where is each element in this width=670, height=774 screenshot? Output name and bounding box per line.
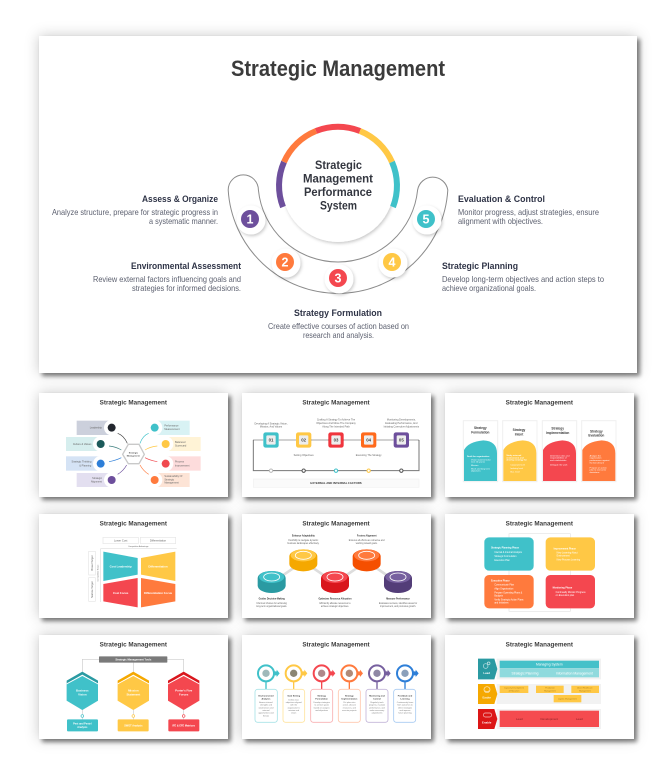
- card body text: next 10 years): [471, 461, 485, 464]
- card body text: organization: [590, 457, 602, 460]
- left items: [66, 420, 119, 488]
- puck captions: improvement, and promotes growth.: [380, 605, 416, 608]
- stage titles: Learning: [400, 698, 410, 700]
- text: environmental assessment: strategies for informed decisions.: [132, 283, 241, 293]
- quadrant labels: Cost Focus: [113, 591, 129, 595]
- card titles: Strategy: [590, 429, 603, 433]
- step descriptions: [254, 419, 420, 457]
- panel: thumbnail lead excite enable: [445, 635, 634, 739]
- step descriptions: Executing The Strategy: [356, 454, 382, 457]
- puck captions: Ensures all efforts are cohesive and: [349, 539, 385, 542]
- text: evaluation and control: Monitor progress, adjust strategies, ensure: [458, 207, 599, 217]
- puck captions: Informed choices for achieving: [256, 602, 288, 605]
- step descriptions: Along The Intended Path: [322, 425, 350, 428]
- puck captions: business landscapes effectively.: [287, 542, 320, 545]
- card body text: deviations: [590, 471, 599, 474]
- tab labels: Enable: [482, 721, 492, 725]
- enable bar: Lead: [516, 717, 523, 721]
- card titles: Strategy: [474, 426, 487, 430]
- text: evaluation and control: alignment with objectives.: [458, 216, 543, 226]
- phase text: New Process Learning: [557, 558, 581, 561]
- phase text: Environment: [557, 554, 570, 557]
- purple puck: [384, 571, 412, 593]
- quadrant labels: Cost Leadership: [110, 564, 132, 568]
- zigzag connector: [272, 561, 398, 583]
- text: environmental assessment: Environmental Assessment: [131, 261, 242, 272]
- card titles: Intent: [515, 432, 524, 436]
- right items: Measurement: [164, 428, 180, 431]
- stage descriptions: weaknesses and: [259, 707, 273, 709]
- stage titles: Goal Setting: [287, 695, 301, 698]
- thumbnail title: Strategic Management: [506, 400, 573, 406]
- stage titles: Analysis: [262, 697, 271, 700]
- stage descriptions: Regularly track: [370, 701, 384, 704]
- text: environmental assessment: Review external factors influencing goals and: [93, 274, 241, 284]
- phase text: Execution Plan: [494, 559, 511, 562]
- tab labels: Lead: [483, 671, 490, 675]
- left items: & Planning: [79, 464, 92, 467]
- colored shapes: [464, 440, 497, 481]
- phase text: Improvement Phase: [554, 547, 576, 550]
- excite labels: Logistic Management: [558, 697, 577, 700]
- right items: [147, 420, 201, 488]
- card titles: Evaluation: [588, 433, 604, 437]
- hexagon labels: Mission: [128, 688, 139, 692]
- card outlines: [463, 421, 616, 482]
- phase text: Prepare Operating Plans &: [494, 591, 523, 594]
- stage titles: Control: [373, 697, 381, 700]
- left items: Leadership: [90, 427, 103, 430]
- red puck: [321, 571, 349, 593]
- step 4 badge: 4: [389, 256, 396, 270]
- stage descriptions: resources, and: [343, 706, 356, 709]
- left items: Strategic Thinking: [71, 460, 92, 463]
- text: strategy formulation: [268, 308, 409, 340]
- panel: thumbnail generic strategy matrix: Competitive Advantage: [128, 545, 149, 548]
- target rings: [258, 665, 413, 689]
- phase text: Internal & Internal Analysis: [494, 551, 523, 554]
- card body text: Mission: [471, 465, 479, 467]
- left items: Culture & Values: [73, 443, 92, 446]
- step descriptions: Evaluating Performance, And: [385, 422, 418, 425]
- stage descriptions: from outcomes to: [397, 704, 414, 707]
- managing system bars: [500, 661, 599, 668]
- card body text: Study external: [506, 454, 522, 457]
- tool labels: [73, 723, 196, 729]
- step descriptions: Mission, And Values: [260, 426, 283, 429]
- stage descriptions: threats: [263, 714, 269, 717]
- card titles: [471, 426, 604, 437]
- stage descriptions: adjustments: [372, 712, 382, 715]
- axis headers: [89, 537, 176, 601]
- card body text: objectives: [471, 470, 481, 473]
- card body text: responsibilities of: [550, 457, 567, 460]
- U-shaped track: [228, 175, 448, 293]
- puck captions: Evaluates success, identifies areas for: [379, 602, 417, 605]
- right items: Scorecard: [175, 445, 187, 448]
- step squares: 01: [269, 438, 274, 443]
- stage titles: [259, 695, 413, 700]
- card titles: Strategy: [513, 428, 526, 432]
- ring arrows: [274, 670, 419, 677]
- step descriptions: Initiating Corrective Adjustments: [384, 425, 420, 428]
- puck captions: Optimizes Resource Allocation: [318, 597, 352, 600]
- quadrant labels: [110, 564, 173, 595]
- step descriptions: Monitoring Developments,: [387, 419, 416, 422]
- center heading: Strategic: [315, 158, 362, 172]
- orange puck: [353, 549, 381, 571]
- step 2 badge: [272, 248, 300, 278]
- step squares: [263, 432, 409, 448]
- card body text: Industry level: [510, 467, 524, 470]
- text: strategy formulation: research and analysis.: [303, 330, 374, 340]
- panel: main slide: [39, 36, 637, 373]
- excite labels: Production: [545, 687, 555, 690]
- right items: Strategic: [164, 478, 175, 481]
- card body text: plan to overcome: [590, 469, 607, 472]
- title: Strategic Management: [231, 56, 445, 81]
- stage descriptions: execute projects: [342, 709, 357, 712]
- stage descriptions: [258, 698, 414, 717]
- text: strategy formulation: Create effective courses of action based on: [268, 321, 409, 331]
- step squares: 02: [301, 438, 307, 443]
- stage descriptions: make necessary: [370, 709, 384, 712]
- managing system labels: [511, 663, 593, 675]
- hexagon labels: Porter's Five: [175, 688, 193, 692]
- step squares: 05: [399, 438, 404, 443]
- managing system labels: Managing System: [536, 663, 563, 667]
- card body text: Delegate the work: [550, 464, 568, 467]
- phase text: Execution Phase: [491, 579, 510, 582]
- panel: thumbnail six targets: [242, 635, 431, 739]
- right items: Improvement: [175, 464, 190, 467]
- card titles: Strategy: [551, 427, 564, 431]
- stage descriptions: and objectives: [315, 709, 328, 712]
- panel: thumbnail generic strategy matrix: Narrow Target: [90, 581, 94, 598]
- puck captions: [256, 535, 417, 608]
- thumbnail title: Strategic Management: [100, 400, 167, 406]
- text: environmental assessment: [93, 261, 242, 293]
- hexagon labels: Statement: [126, 693, 140, 697]
- card body text: develop strategy for: [506, 459, 527, 462]
- enable bar: Lead: [576, 717, 583, 721]
- row backgrounds: [497, 659, 601, 729]
- center heading: Performance: [304, 185, 372, 199]
- card body text: Analyze the: [590, 454, 602, 457]
- excite labels: [504, 687, 593, 700]
- right items: Management: [164, 482, 179, 485]
- puck captions: Guides Decision-Making: [259, 598, 285, 600]
- right items: Process: [175, 460, 185, 463]
- panel: thumbnail generic strategy matrix: Broad Target: [90, 555, 94, 571]
- stage descriptions: Assess internal: [259, 701, 273, 704]
- right items: Sustainability Of: [164, 475, 183, 478]
- card body text: Vision statement (for: [471, 458, 491, 461]
- phase text: Verify Strategic Action Plans: [494, 598, 524, 601]
- stage titles: Strategy: [317, 695, 327, 698]
- step 5 badge: [412, 206, 442, 234]
- thumbnail title: Strategic Management: [506, 522, 573, 528]
- step 4 badge: [378, 248, 408, 278]
- tree connectors: [82, 659, 184, 719]
- stage descriptions: organization's: [288, 706, 300, 709]
- text: strategic planning: [442, 261, 604, 293]
- panel: thumbnail 3D pucks: [242, 514, 431, 618]
- segmented ring: [279, 127, 397, 207]
- stage descriptions: refine strategies: [398, 706, 412, 709]
- text: evaluation and control: [458, 194, 599, 226]
- stage boxes: [255, 689, 416, 722]
- factors bar: EXTERNAL AND INTERNAL FACTORS: [310, 481, 362, 485]
- card body text: environment and: [506, 456, 524, 459]
- stage titles: Monitoring and: [369, 695, 385, 698]
- panel: thumbnail generic strategy matrix: [39, 514, 228, 618]
- step descriptions: Objectives And Move The Company: [316, 422, 357, 425]
- tool labels: Analysis: [77, 726, 88, 729]
- stage titles: Formulation: [315, 697, 329, 700]
- phase text: Strategic Planning Phase: [491, 547, 520, 550]
- step descriptions: Crafting A Strategy To Achieve The: [317, 419, 356, 422]
- stage descriptions: Define clear: [288, 698, 299, 701]
- center heading: Management: [303, 172, 373, 186]
- rail nodes: [269, 469, 403, 472]
- right items: Performance: [164, 425, 179, 428]
- step 3 badge: [324, 264, 354, 294]
- thumbnail title: Strategic Management: [302, 643, 370, 649]
- stage descriptions: performance, and: [369, 706, 385, 709]
- stage descriptions: progress, evaluate: [369, 704, 386, 707]
- center hexagon: [123, 444, 144, 464]
- phase boxes: [484, 537, 534, 571]
- stage descriptions: external: [262, 709, 270, 712]
- panel: thumbnail management tools: [39, 635, 228, 739]
- puck captions: Enhance Adaptability: [292, 535, 315, 538]
- card body text: Bus. level: [510, 471, 520, 473]
- center hexagon: Management: [127, 454, 140, 457]
- center heading: [303, 158, 373, 212]
- phase text: Budgets: [494, 594, 504, 597]
- tool boxes: [67, 719, 98, 731]
- card body text: each stakeholder: [550, 459, 567, 462]
- puck captions: Flexibility to navigate dynamic: [288, 539, 319, 542]
- factors bar: [253, 479, 419, 487]
- panel: thumbnail generic strategy matrix: Lower Cost: [114, 539, 128, 543]
- managing system labels: Strategic Planning: [511, 671, 539, 675]
- excite labels: Management: [544, 689, 556, 692]
- text: assess and organize: Analyze structure, prepare for strategic progress in: [52, 207, 218, 217]
- stage descriptions: Continuously learn: [397, 701, 413, 704]
- panel: thumbnail hexagon hub: [39, 393, 228, 497]
- stage descriptions: strengths and: [260, 704, 272, 707]
- connector arrows: [109, 433, 157, 474]
- central circle: [282, 130, 394, 242]
- left items: Strategic: [92, 477, 103, 480]
- phase text: Strategic Formulation: [494, 555, 517, 558]
- enable bar: [500, 711, 599, 727]
- row arrow tabs: [478, 659, 497, 679]
- tab labels: [482, 671, 492, 725]
- phase text: New Learning About: [557, 551, 578, 554]
- yellow puck: [289, 549, 317, 571]
- phase loop lines: [509, 534, 570, 611]
- stage titles: Strategy: [345, 695, 354, 698]
- enable bar: Development: [541, 717, 558, 721]
- matrix quadrants: [103, 552, 138, 581]
- hexagons: [67, 672, 98, 710]
- thumbnail title: Strategic Management: [100, 522, 167, 528]
- right items: Balanced: [175, 441, 186, 444]
- step 2 badge: 2: [282, 256, 289, 270]
- tool labels: IFE & EFE Matrices: [172, 724, 196, 727]
- stage descriptions: action, allocate: [343, 704, 357, 707]
- stage descriptions: based on analysis: [314, 707, 330, 709]
- puck captions: Efficiently allocate resources to: [320, 602, 351, 605]
- quadrant labels: Differentiation Focus: [144, 591, 173, 595]
- step descriptions: Developing A Strategic Vision,: [254, 422, 288, 425]
- connector dots: [81, 715, 185, 717]
- text: assess and organize: Assess & Organize: [142, 194, 218, 205]
- card body text: performance against: [590, 459, 610, 462]
- phase text: Communicate Plan: [494, 583, 515, 586]
- phase text: Continually Monitor Progress: [556, 591, 586, 594]
- hexagon labels: [76, 688, 193, 697]
- excite boxes: [500, 686, 599, 702]
- phase text: and Initiatives: [494, 601, 509, 604]
- stage descriptions: with the: [290, 704, 298, 707]
- stage descriptions: and improve: [400, 709, 411, 712]
- center heading: System: [320, 198, 357, 212]
- thumbnail title: Strategic Management: [506, 643, 573, 649]
- puck captions: long-term organizational goals.: [256, 605, 287, 608]
- hexagon labels: Business: [76, 688, 89, 692]
- step 3 badge: 3: [335, 272, 342, 286]
- step squares: 03: [334, 438, 339, 443]
- card body text: Prepare an action: [590, 466, 607, 469]
- text: strategy formulation: Strategy Formulation: [294, 308, 382, 319]
- card body text: Corporate level: [510, 464, 525, 467]
- stage titles: Implementation: [341, 697, 358, 700]
- step descriptions: Setting Objectives: [294, 454, 314, 457]
- panel: thumbnail four strategy cards: [445, 393, 634, 497]
- stage descriptions: objectives aligned: [286, 701, 302, 704]
- excite labels: Asset Healthcare: [577, 687, 593, 690]
- tool labels: Pest and Pestel: [73, 723, 92, 726]
- puck captions: achieve strategic objectives.: [321, 605, 349, 608]
- phase text: on Execution plan: [556, 594, 575, 597]
- left items: Alignment: [91, 480, 102, 483]
- stage descriptions: future planning: [398, 712, 412, 715]
- step squares: 04: [366, 438, 372, 443]
- excite labels: & Education: [509, 689, 519, 692]
- managing system labels: Information Management: [556, 671, 593, 675]
- phase text: Monitoring Phase: [553, 587, 573, 590]
- excite labels: Capacity Development: [504, 687, 524, 690]
- axis lines: [101, 549, 177, 602]
- phase text: [491, 547, 586, 604]
- quadrant labels: Differentiation: [148, 564, 168, 568]
- text: assess and organize: a systematic manner.: [149, 216, 218, 226]
- stage descriptions: mission and: [288, 710, 299, 712]
- tool labels: SWOT Analysis: [124, 724, 143, 727]
- puck captions: Fosters Alignment: [357, 535, 377, 538]
- ring centers: [262, 670, 409, 677]
- stage descriptions: vision: [291, 713, 296, 715]
- step 1 badge: [236, 206, 266, 234]
- text: strategic planning: Strategic Planning: [442, 261, 518, 272]
- hexagon labels: Forces: [179, 693, 189, 697]
- tab labels: Excite: [482, 695, 491, 699]
- stage titles: Feedback and: [398, 696, 413, 698]
- center hexagon: Strategic: [129, 452, 139, 455]
- process rails: [253, 440, 419, 471]
- thumbnail title: Strategic Management: [302, 522, 370, 528]
- puck captions: working toward goals.: [356, 542, 378, 545]
- stage descriptions: Put plans into: [343, 701, 356, 704]
- text: assess and organize: [52, 194, 218, 226]
- thumbnail title: Strategic Management: [100, 643, 167, 649]
- text: strategic planning: achieve organizational goals.: [442, 283, 536, 293]
- text: evaluation and control: Evaluation & Control: [458, 194, 545, 205]
- excite labels: Management: [579, 689, 591, 692]
- card titles: Implementation: [546, 431, 569, 435]
- step 5 badge: 5: [423, 212, 430, 226]
- panel: thumbnail generic strategy matrix: Differentiation: [150, 539, 167, 543]
- step 1 badge: 1: [247, 212, 254, 226]
- puck captions: Measure Performance: [386, 597, 410, 600]
- panel: thumbnail process steps: [242, 393, 431, 497]
- card body text: the benchmark: [590, 461, 605, 464]
- stage descriptions: opportunities and: [258, 712, 274, 715]
- panel: thumbnail generic strategy matrix: Competitive Scope: [97, 564, 100, 581]
- phase text: Align Organization: [494, 587, 514, 590]
- thumbnail title: Strategic Management: [302, 400, 370, 406]
- card titles: Formulation: [471, 430, 490, 434]
- card body text: Short and long term: [471, 467, 490, 470]
- tools header bar: Strategic Management Tools: [115, 658, 152, 662]
- card body text: Draft the organization: [467, 455, 490, 458]
- teal puck: [258, 571, 286, 593]
- stage descriptions: to achieve goals: [314, 704, 329, 707]
- stage titles: Environmental: [259, 695, 274, 698]
- panel: thumbnail phases: [445, 514, 634, 618]
- text: strategic planning: Develop long-term objectives and action steps to: [442, 274, 604, 284]
- stage descriptions: Develop strategies: [313, 701, 330, 704]
- tab icons: [483, 662, 492, 717]
- card body text: [467, 454, 610, 474]
- hexagon labels: Vision: [78, 693, 87, 697]
- card body text: Determine roles and: [550, 454, 570, 457]
